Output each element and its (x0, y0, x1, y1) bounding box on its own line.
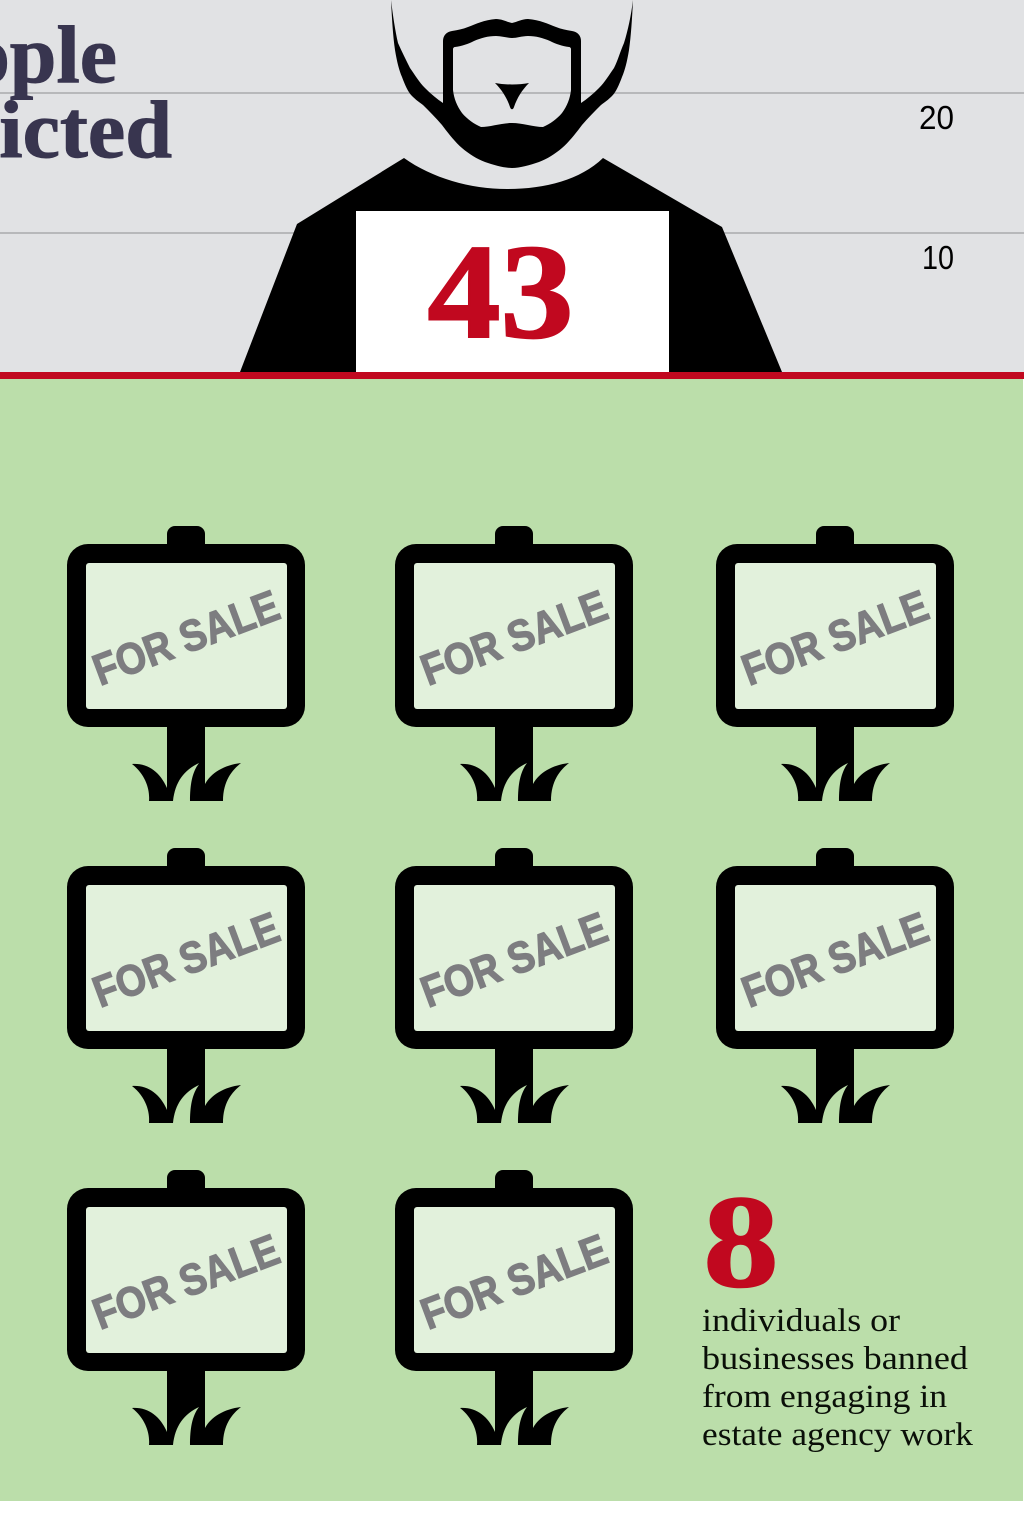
axis label: 20: 20 (919, 99, 954, 136)
icon: chin tuft (495, 83, 529, 109)
icon: for sale sign 7: FOR SALE (86, 1225, 286, 1339)
icon: for sale sign 4 (67, 848, 305, 1123)
axis label: 10: 10 (922, 239, 954, 276)
icon: for sale sign 2 (395, 526, 633, 801)
panel: estate agency bans (0, 379, 1023, 1501)
placard: 43: 43 (428, 218, 574, 367)
icon: beard (391, 0, 633, 168)
icon: for sale sign 8 (395, 1170, 633, 1445)
icon: for sale sign 3: FOR SALE (735, 581, 935, 695)
icon: for sale sign 1: FOR SALE (86, 581, 286, 695)
text: banned description: from engaging in (702, 1379, 947, 1415)
icon: for sale sign 2: FOR SALE (414, 581, 614, 695)
icon: for sale sign 8: FOR SALE (414, 1225, 614, 1339)
placard: 43 (356, 211, 669, 372)
panel: convictions height chart (0, 0, 1024, 372)
icon: torso silhouette (240, 158, 782, 372)
icon: for sale sign 6 (716, 848, 954, 1123)
heading: people convicted (0, 9, 172, 175)
divider bar (0, 372, 1024, 379)
text: banned description: individuals or (702, 1303, 900, 1339)
icon: for sale sign 4: FOR SALE (86, 903, 286, 1017)
icon: for sale sign 5 (395, 848, 633, 1123)
icon: for sale sign 5: FOR SALE (414, 903, 614, 1017)
text: banned description: businesses banned (702, 1341, 969, 1377)
text: banned description (702, 1303, 974, 1453)
icon: for sale sign 6: FOR SALE (735, 903, 935, 1017)
icon: for sale sign 3 (716, 526, 954, 801)
icon: for sale sign 1 (67, 526, 305, 801)
statistic: 8: 8 (704, 1168, 778, 1315)
icon: for sale sign 7 (67, 1170, 305, 1445)
text: banned description: estate agency work (702, 1417, 974, 1453)
